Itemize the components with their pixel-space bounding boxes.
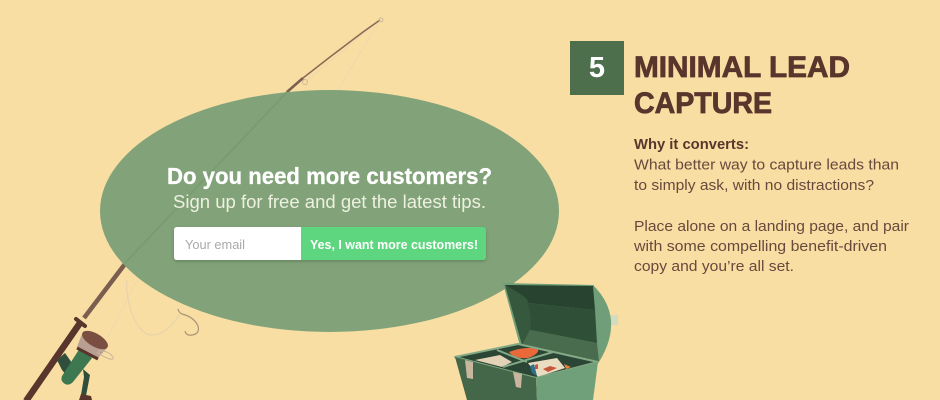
number badge [570, 41, 624, 95]
crank knob [79, 394, 92, 400]
email input [174, 227, 301, 260]
lid handle [609, 315, 618, 325]
lid interior top [505, 285, 595, 310]
fishing line [108, 20, 380, 337]
input placeholder: Your email [185, 237, 245, 252]
advice paragraph: Place alone on a landing page, and pair [634, 219, 909, 235]
explanation paragraph [634, 158, 899, 194]
spool cap [79, 327, 111, 353]
advice paragraph: with some compelling benefit-driven [633, 239, 887, 255]
form subheading: Sign up for free and get the latest tips. [173, 192, 486, 212]
red and blue lure marks [530, 364, 571, 376]
spool lower rim [77, 348, 98, 359]
lid frame [503, 283, 599, 362]
title [634, 51, 850, 120]
rod seen through ellipse [125, 92, 287, 263]
box rim and dividers [455, 344, 598, 378]
form shadow [174, 227, 486, 260]
panel: green form ellipse [100, 90, 559, 332]
title: MINIMAL LEAD [634, 51, 850, 84]
why it converts label: Why it converts: [634, 137, 749, 153]
title: CAPTURE [634, 87, 772, 120]
lid interior bottom [520, 330, 599, 362]
handle guard [76, 319, 85, 326]
number badge: 5 [589, 52, 605, 84]
orange lure tray [509, 348, 538, 358]
icon: fish hook [178, 309, 198, 335]
explanation paragraph: What better way to capture leads than [634, 158, 899, 174]
box side [536, 362, 598, 400]
lid side [590, 285, 611, 362]
icon: fishing reel [57, 327, 113, 400]
form heading: Do you need more customers? [167, 163, 492, 189]
email signup form [174, 227, 486, 260]
explanation paragraph: to simply ask, with no distractions? [634, 178, 874, 194]
body text [633, 137, 909, 275]
lower rod [84, 260, 128, 318]
rod guides [302, 18, 383, 84]
advice paragraph [633, 219, 909, 275]
button label: Yes, I want more customers! [310, 238, 478, 252]
advice paragraph: copy and you’re all set. [634, 259, 794, 275]
paper stack [475, 355, 512, 367]
icon: tackle box [455, 283, 618, 400]
feather lures [528, 358, 565, 377]
fishing rod [26, 18, 383, 400]
rod handle [26, 323, 80, 400]
lid interior middle [527, 303, 597, 343]
bail wire [97, 351, 113, 359]
reel crank [81, 369, 90, 396]
reel arm [57, 353, 72, 376]
spool [77, 334, 107, 358]
latches [465, 360, 522, 388]
lid left shade [505, 285, 531, 345]
reel body [61, 348, 92, 385]
box interior [455, 344, 598, 378]
rod tip [303, 20, 380, 78]
box front [455, 357, 537, 400]
